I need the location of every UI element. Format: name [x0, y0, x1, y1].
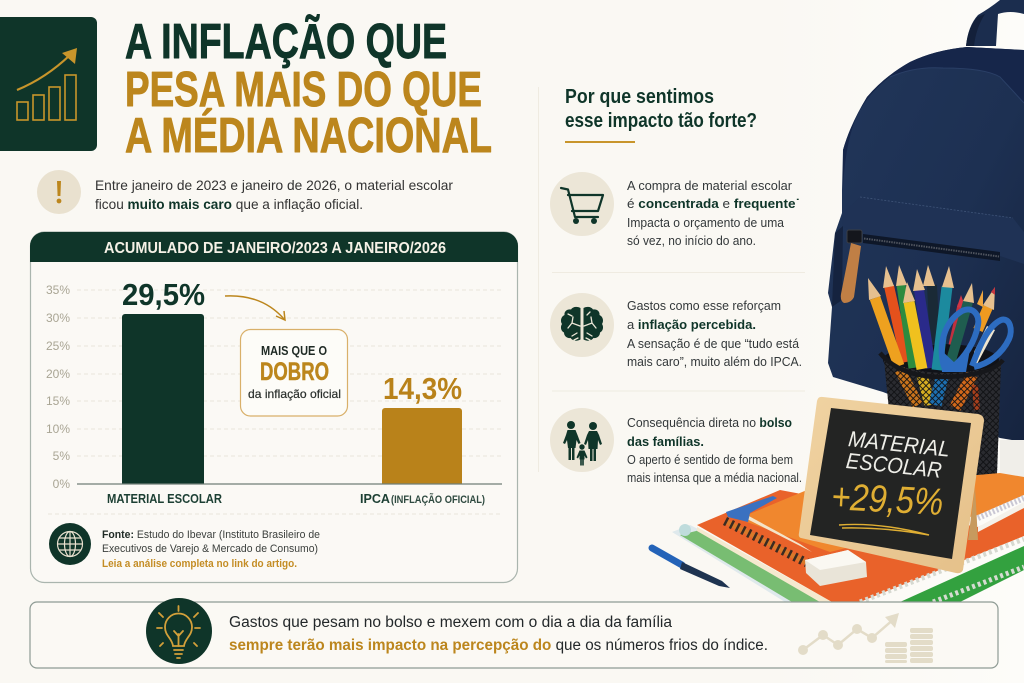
title: A INFLAÇÃO QUE: [125, 15, 447, 69]
title: PESA MAIS DO QUE: [125, 63, 482, 117]
reason text: Impacta o orçamento de uma: [627, 216, 784, 230]
y axis labels: 25%: [46, 339, 70, 353]
illustration: chalkboard: [799, 397, 984, 573]
illustration: notebooks: [672, 473, 1024, 602]
illustration: backpack: [828, 0, 1024, 442]
pencils: [868, 265, 995, 370]
panel: accumulated chart: [30, 232, 518, 582]
reason text: [627, 179, 800, 248]
bar: IPCA: 14,3%: [383, 371, 462, 406]
heading: why we feel: esse impacto tão forte?: [565, 110, 757, 132]
icon: faded chart and coins: [798, 613, 933, 663]
arrow: [225, 296, 285, 320]
y axis labels: 35%: [46, 283, 70, 297]
reason text: a inflação percebida.: [627, 318, 756, 332]
intro text: [95, 177, 453, 212]
illustration: pen: [652, 548, 730, 588]
icon: globe: [49, 523, 91, 565]
illustration: chalkboard: MATERIAL: [847, 426, 951, 462]
reason text: Consequência direta no bolso: [627, 416, 792, 430]
callout: double: DOBRO: [260, 358, 329, 386]
takeaway text: [229, 614, 768, 654]
title: A MÉDIA NACIONAL: [125, 109, 492, 163]
y axis labels: 30%: [46, 311, 70, 325]
bar: IPCA: (INFLAÇÃO OFICIAL): [391, 493, 485, 506]
callout: double: da inflação oficial: [248, 387, 341, 401]
reason text: das famílias.: [627, 435, 704, 449]
reason text: O aperto é sentido de forma bem: [627, 453, 793, 467]
callout: double: [240, 330, 348, 416]
intro text: Entre janeiro de 2023 e janeiro de 2026, o material escolar: [95, 177, 453, 193]
reason text: A compra de material escolar: [627, 179, 792, 193]
illustration: chalkboard: ESCOLAR: [845, 448, 943, 483]
reason text: Gastos como esse reforçam: [627, 299, 781, 313]
y axis labels: 20%: [46, 367, 70, 381]
reason text: mais intensa que a média nacional.: [627, 471, 802, 485]
panel: takeaway: [30, 598, 998, 668]
reason text: é concentrada e frequente˙: [627, 197, 800, 211]
reason: family budget: [550, 408, 802, 485]
bar: material escolar: [107, 277, 223, 506]
icon: brain: [550, 293, 614, 357]
source text: [102, 529, 320, 570]
panel header: ACUMULADO DE JANEIRO/2023 A JANEIRO/2026: [104, 240, 446, 257]
reason: perceived inflation: [550, 293, 802, 369]
reason text: [627, 299, 802, 369]
reason text: só vez, no início do ano.: [627, 234, 756, 248]
reason text: mais caro”, muito além do IPCA.: [627, 355, 802, 369]
heading: why we feel: Por que sentimos: [565, 86, 714, 108]
bar: IPCA: IPCA: [360, 491, 391, 506]
source text: Fonte: Estudo do Ibevar (Instituto Brasileiro de: [102, 529, 320, 541]
takeaway text: sempre terão mais impacto na percepção do que os números frios do índice.: [229, 637, 768, 654]
reason text: [627, 416, 802, 485]
zipper pull: [841, 230, 862, 303]
source text: Executivos de Varejo & Mercado de Consumo): [102, 543, 318, 555]
panel header: [30, 232, 518, 262]
intro text: ficou muito mais caro que a inflação oficial.: [95, 196, 363, 212]
y axis labels: [46, 283, 70, 491]
reason text: A sensação é de que “tudo está: [627, 337, 799, 351]
icon: family: [550, 408, 614, 472]
heading: why we feel: [565, 86, 757, 143]
title: [125, 15, 492, 163]
y axis labels: 15%: [46, 394, 70, 408]
y axis labels: 5%: [53, 449, 70, 463]
y axis labels: 0%: [53, 477, 70, 491]
illustration: pencil cup: [868, 265, 1011, 490]
icon: alert: [37, 170, 81, 214]
reason: concentrated purchase: [550, 172, 800, 248]
y axis labels: 10%: [46, 422, 70, 436]
scissors: [941, 309, 1011, 372]
source text: Leia a análise completa no link do artigo.: [102, 558, 297, 570]
bar: material escolar: MATERIAL ESCOLAR: [107, 491, 223, 506]
bar: IPCA: [360, 371, 485, 506]
icon: cart: [550, 172, 614, 236]
illustration: chalkboard: +29,5%: [830, 476, 944, 524]
illustration: eraser: [805, 550, 867, 586]
icon: rising chart badge: [0, 17, 97, 151]
icon: lightbulb: [146, 598, 212, 664]
takeaway text: Gastos que pesam no bolso e mexem com o dia a dia da família: [229, 614, 672, 631]
callout: double: MAIS QUE O: [261, 343, 327, 358]
bar: material escolar: 29,5%: [122, 277, 205, 312]
